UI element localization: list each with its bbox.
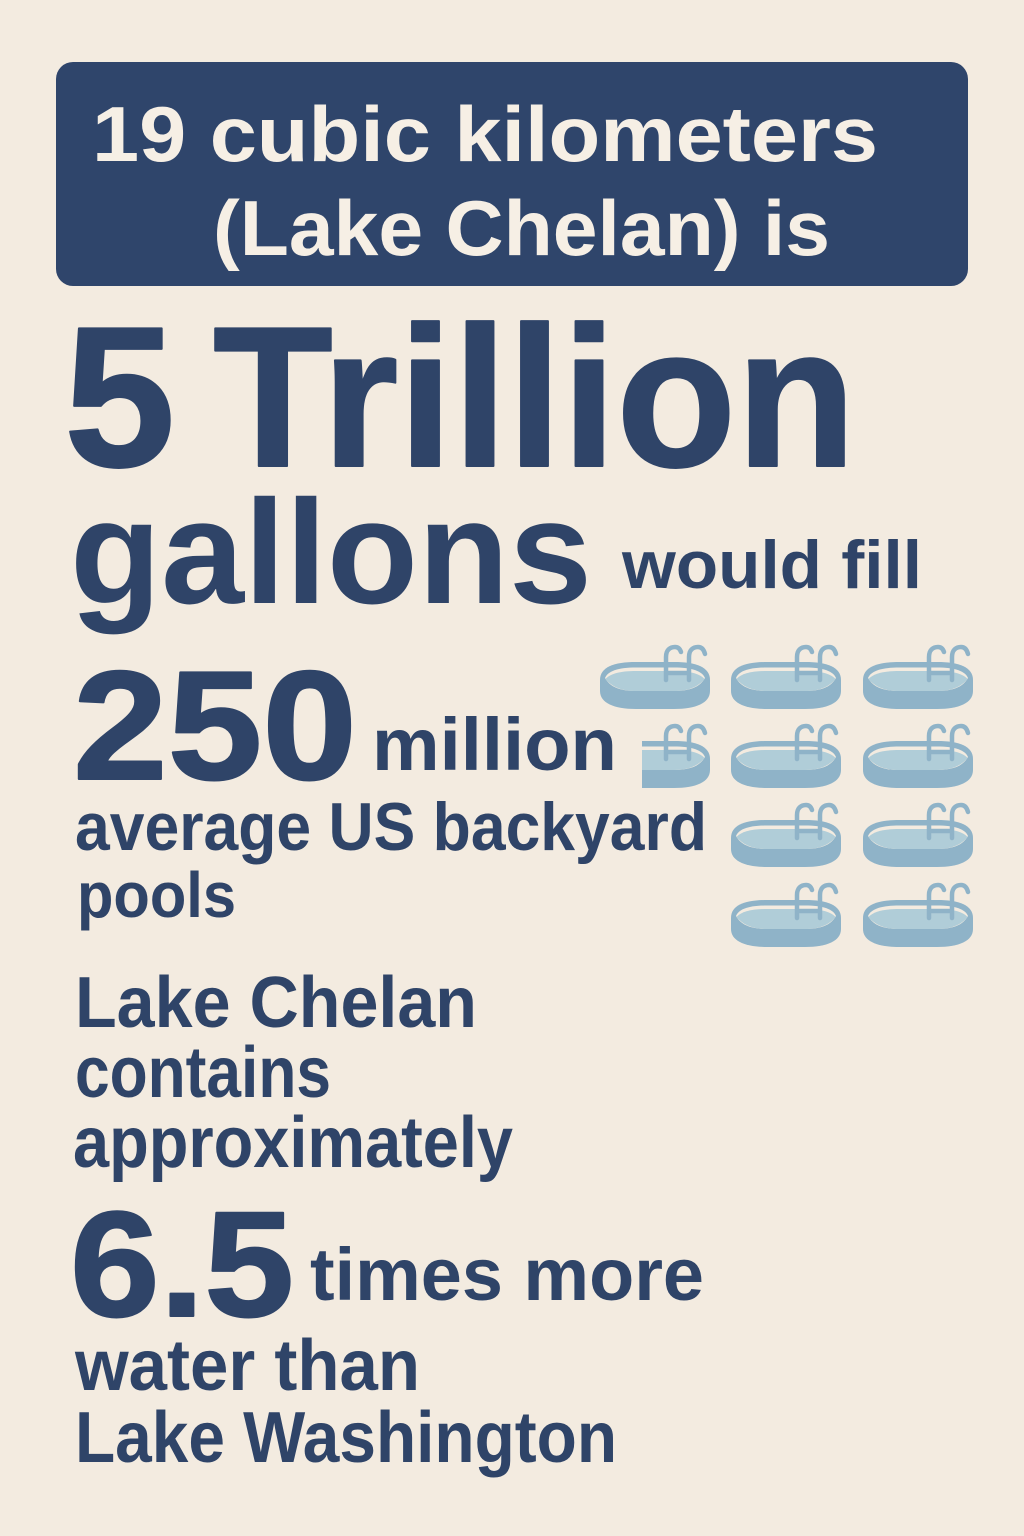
- header banner: 19 cubic kilometers: [92, 90, 878, 178]
- text block: Lake Chelan contains approximately: Lake Chelan: [75, 963, 477, 1043]
- statistic: 6.5 times more water than Lake Washington: [70, 1180, 704, 1478]
- statistic: 250 million average US backyard pools: [73, 639, 707, 931]
- statistic: 250 million average US backyard pools: average US backyard: [75, 789, 707, 865]
- statistic: 250 million average US backyard pools: 250: [73, 639, 357, 812]
- statistic: 6.5 times more water than Lake Washington: Lake Washington: [75, 1398, 617, 1478]
- headline: 5 Trillion: 5: [64, 286, 175, 509]
- icon grid: swimming pools: [600, 647, 973, 947]
- header banner: (Lake Chelan) is: [213, 184, 830, 272]
- header banner: [56, 62, 968, 286]
- statistic: 250 million average US backyard pools: pools: [77, 859, 236, 931]
- statistic: 6.5 times more water than Lake Washington: 6.5: [70, 1180, 294, 1348]
- statistic: 6.5 times more water than Lake Washington: water than: [74, 1326, 420, 1406]
- statistic: 6.5 times more water than Lake Washington: times more: [310, 1233, 704, 1316]
- headline: gallons would fill: would fill: [621, 527, 922, 603]
- text block: Lake Chelan contains approximately: contains: [75, 1033, 331, 1113]
- headline: gallons would fill: gallons: [70, 470, 592, 635]
- statistic: 250 million average US backyard pools: million: [372, 703, 617, 786]
- text block: Lake Chelan contains approximately: [73, 963, 513, 1183]
- headline: gallons would fill: [70, 470, 922, 635]
- text block: Lake Chelan contains approximately: approximately: [73, 1103, 513, 1183]
- headline: 5 Trillion: Trillion: [213, 286, 856, 509]
